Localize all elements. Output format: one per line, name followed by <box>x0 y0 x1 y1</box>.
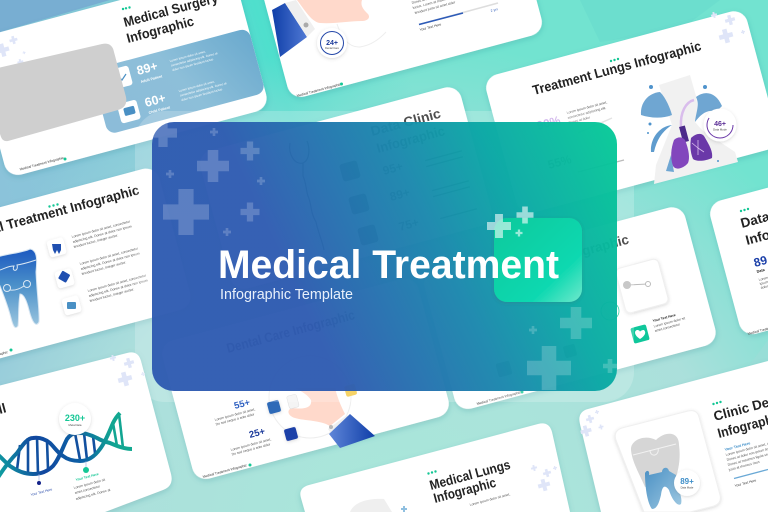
slide: dna: Your Text Here <box>75 472 99 482</box>
slide: dental care with hand: 55+ <box>233 397 252 412</box>
slide: heart infographic: amet,consectetur <box>654 322 681 333</box>
slide: medical surgery: Lorem ipsum dolor sit amet, <box>178 79 215 93</box>
slide: dna: amet,consectetur <box>74 484 101 495</box>
slide: heart infographic: Medical Treatment Infographic <box>476 390 522 406</box>
slide: dna: Your Text Here <box>30 487 53 497</box>
slide: dental care with hand: Dental Care Infographic <box>225 307 357 356</box>
slide: medical lungs: Infographic <box>432 475 498 506</box>
slide: dental care with hand: Lorem ipsum dolor sit amet, <box>214 407 256 422</box>
slide: medical surgery: Child Patient <box>148 105 171 115</box>
slide: dental care with hand: Do sed neque a ante dolor <box>215 412 256 426</box>
slide: medical surgery: Lorem ipsum dolor sit amet, <box>169 49 206 63</box>
slide: treatment lungs: 90% <box>535 113 562 133</box>
slide: dna: adipiscing elit. Donec at <box>75 488 111 501</box>
slide: medical surgery: Medical Treatment Infographic <box>19 156 65 171</box>
slide: hand with dental care badge: Your Text Here <box>419 22 442 32</box>
slide: treatment lungs: 55% <box>546 152 573 172</box>
slide: hand with dental care badge <box>254 0 545 100</box>
slide: dental care with hand: Medical Treatment Infographic <box>202 463 248 479</box>
slide: hand with dental care badge: 2 yrs <box>490 7 499 13</box>
slide: medical surgery: 60+ <box>143 91 167 110</box>
slide: dental treatment: tincidunt luctus, Integer auctor. <box>73 233 119 249</box>
slide: dental care with hand: 25+ <box>248 426 267 441</box>
slide: dental treatment: Lorem ipsum dolor sit amet, consectetur <box>87 273 147 293</box>
slide: dental care with hand <box>159 275 452 482</box>
slide: data clinic: 89+ <box>388 185 411 204</box>
slide: clinic dental: justo at rhoncus risus <box>727 460 760 472</box>
slide: data clinic: Infographic <box>375 123 447 156</box>
slide: dental treatment: tincidunt luctus, Integer auctor. <box>81 260 127 276</box>
slide: heart infographic: Your Text Here <box>652 313 676 323</box>
badge: 230+: 230+ <box>65 413 85 423</box>
slide: data clinic: 95+ <box>381 159 404 178</box>
slide: clinic dental: Your Text Here <box>734 478 757 488</box>
slide: medical surgery <box>0 0 270 178</box>
slide: hand with dental care badge: Dental Care <box>325 46 339 50</box>
slide: medical surgery: consectetur adipiscing elit. Donec at <box>171 51 218 67</box>
slide: medical lungs: Lorem ipsum dolor sit amet, <box>469 492 511 507</box>
main panel <box>149 119 617 391</box>
slide: hand with dental care badge: Medical Treatment Infographic <box>296 82 342 98</box>
slide: data right <box>707 134 768 337</box>
slide: medical surgery: 89+ <box>135 59 159 78</box>
slide: medical lungs <box>300 423 570 512</box>
icon: heart tile <box>630 324 650 344</box>
illustration: lungs and body <box>641 75 738 184</box>
badge: 89+: Data Mode <box>681 486 694 490</box>
badge: 46+: 46+ <box>714 121 726 128</box>
slide: dna: Lorem ipsum dolor sit <box>73 478 106 490</box>
slide: heart infographic <box>421 204 719 412</box>
slide: data clinic: 75+ <box>397 215 420 234</box>
slide: dental care with hand: Lorem ipsum dolor sit amet, <box>230 437 272 452</box>
slide: hand with dental care badge: 24+ <box>326 40 338 47</box>
badge: 46+: Data Mode <box>713 128 727 132</box>
decorative crosses <box>149 119 617 390</box>
slide: treatment lungs: consectetur adipiscing elit. <box>567 106 607 120</box>
slide: dental treatment: Lorem ipsum dolor sit amet, consectetur <box>79 246 139 266</box>
slide: data clinic: Data Clinic <box>369 106 443 139</box>
card: puzzle tooth <box>615 411 720 512</box>
slide: medical surgery: consectetur adipiscing elit. Donec at <box>180 81 227 97</box>
chart: dna helix <box>0 413 132 479</box>
slide: dental treatment: adipiscing elit. Donec at dolor non ipsum <box>88 278 148 298</box>
badge: 89+: 89+ <box>680 477 694 486</box>
slide: clinic dental <box>579 361 768 512</box>
slide: medical surgery: Adult Patient <box>140 74 163 84</box>
slide: data right: Data <box>756 268 766 274</box>
slide: hand with dental care badge: tincidunt justo sit amet dolor <box>414 0 457 15</box>
slide: dental treatment: adipiscing elit. Donec at dolor non ipsum <box>80 251 140 271</box>
slide: dental treatment <box>0 165 194 375</box>
slide: dental treatment: Lorem ipsum dolor sit amet, consectetur <box>71 219 131 239</box>
badge: 230+ <box>59 403 91 435</box>
slide: treatment lungs: Lorem ipsum dolor sit amet, <box>566 100 608 115</box>
icon: green square <box>487 206 582 302</box>
slide: treatment lungs <box>483 8 768 216</box>
slide: dental treatment: tincidunt luctus, Integer auctor. <box>89 287 135 303</box>
slide: medical surgery: Infographic <box>125 13 196 46</box>
icon: puzzle tooth <box>0 249 39 328</box>
slide: medical surgery: dolor non ipsum tincidunt luctus. <box>172 57 214 72</box>
badge: 46+ <box>704 108 736 142</box>
title: Medical Treatment <box>218 243 559 287</box>
slide: dna <box>0 352 172 512</box>
slide: treatment lungs: Treatment Lungs Infographic <box>531 38 703 98</box>
slide: heart infographic: Infographic <box>557 232 631 265</box>
slide: clinic dental: Your Text Here <box>724 441 751 452</box>
glass frame <box>135 111 634 402</box>
slide: dental care with hand: Do sed neque a ante dolor <box>231 442 272 456</box>
slide: treatment lungs: Donec at dolor <box>568 115 591 125</box>
slide: data clinic <box>197 84 495 292</box>
slide: heart infographic: Lorem ipsum dolor sit <box>653 316 686 328</box>
subtitle: Infographic Template <box>220 287 353 303</box>
slide: dental treatment: adipiscing elit. Donec at dolor non ipsum <box>72 224 132 244</box>
slide: medical surgery: dolor non ipsum tincidunt luctus. <box>181 87 223 102</box>
badge: 89+ <box>674 470 700 496</box>
slide: medical lungs: Medical Lungs <box>428 457 512 493</box>
badge: 230+: Meta Data <box>69 423 82 427</box>
